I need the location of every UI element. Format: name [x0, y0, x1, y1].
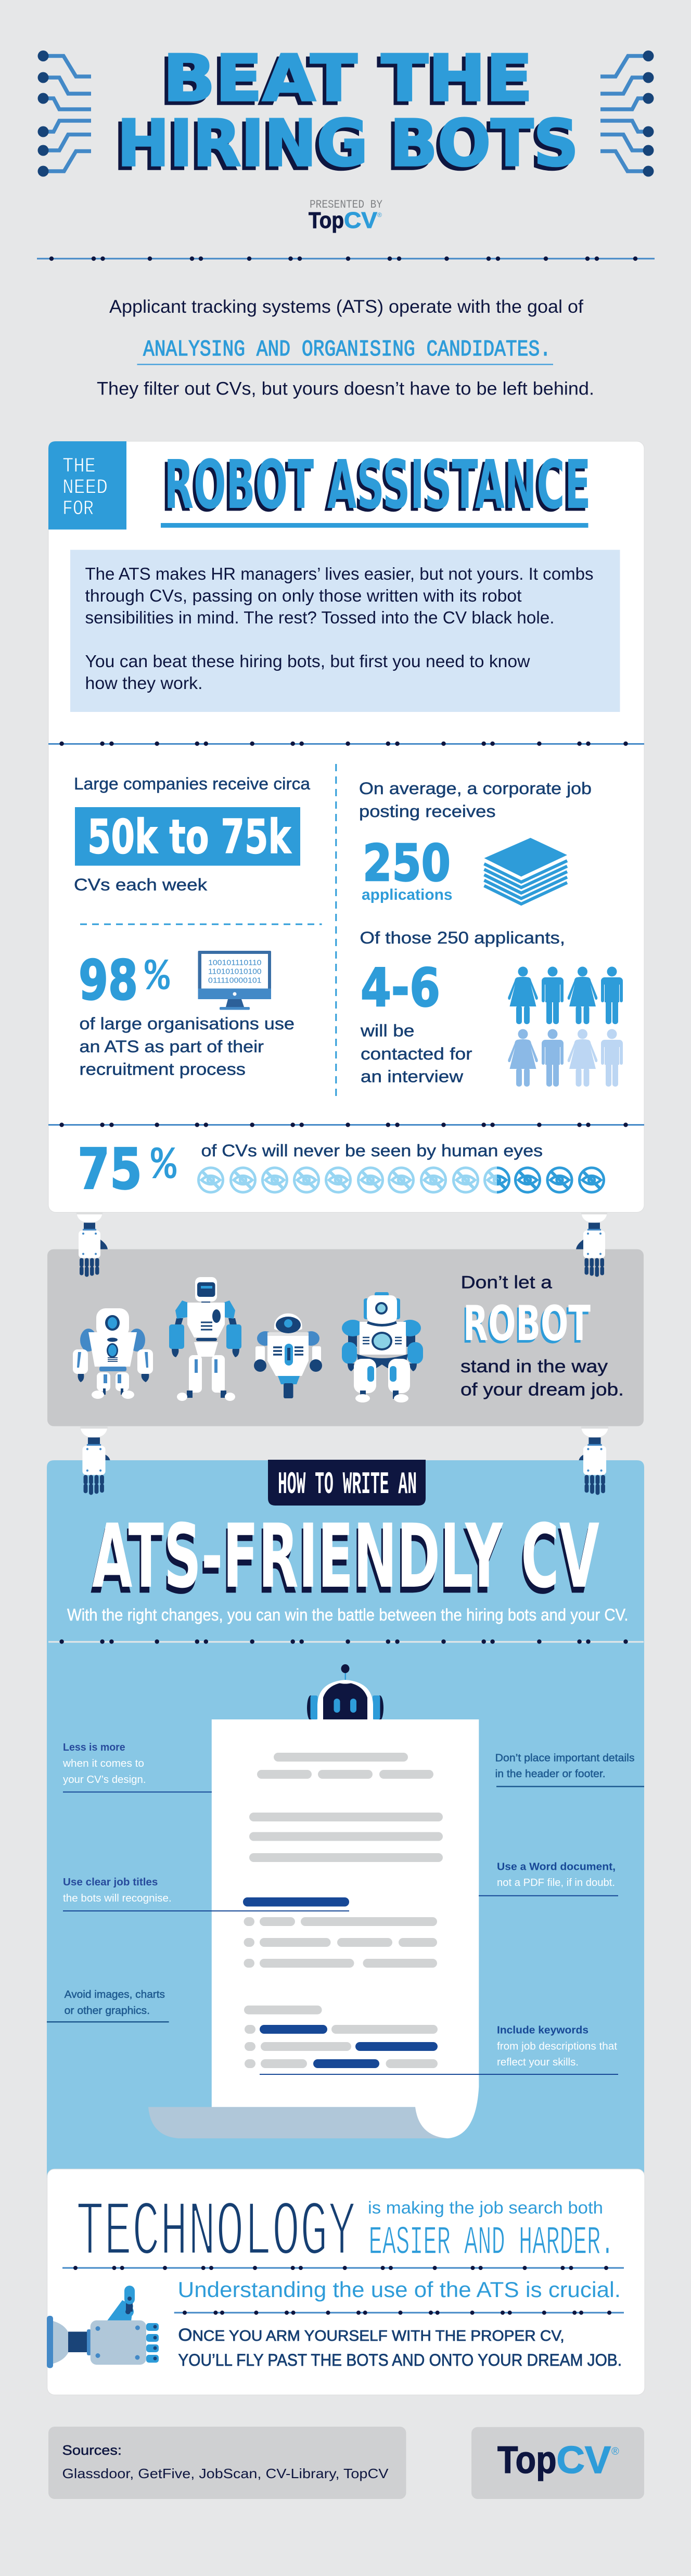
tip: avoid images	[47, 1989, 169, 2022]
stat: 250 applications	[359, 779, 592, 904]
stat: 50k to 75k: CVs each week	[74, 875, 208, 894]
panel: technology conclusion	[47, 2169, 645, 2395]
panel: don't let a robot	[47, 1249, 644, 1426]
tab: the need for	[48, 441, 126, 530]
stat: 75% never seen	[80, 1144, 605, 1194]
tab: the need for: NEED	[62, 477, 108, 500]
robot 2	[169, 1277, 241, 1401]
presented by TopCV logo: ®	[377, 211, 382, 219]
box: TopCV logo: CV	[557, 2439, 611, 2481]
text block: ATS explanation	[70, 550, 620, 712]
text block: ATS explanation: The ATS makes HR managers’ lives easier, but not yours. It combs	[85, 564, 593, 583]
subtitle: With the right changes, you can win the battle between the hiring bots and your CV.	[67, 1605, 629, 1624]
text: once you arm yourself	[178, 2325, 622, 2369]
stat: 250 applications: 250	[363, 834, 451, 892]
stat: 98% use an ATS: 98	[79, 949, 138, 1012]
presented by TopCV logo: Top	[309, 208, 344, 233]
stat: 4-6 contacted for an interview: an interview	[361, 1067, 464, 1086]
text: once you arm yourself: ONCE YOU ARM YOURSELF WITH THE PROPER CV,	[178, 2325, 565, 2345]
panel: how to write an ATS-friendly CV	[47, 1460, 644, 2178]
presented by TopCV logo: CV	[344, 208, 378, 233]
box: sources	[48, 2427, 406, 2499]
robot hand: upper right	[581, 1213, 607, 1277]
text block: ATS explanation: through CVs, passing on only those written with its robot	[85, 586, 521, 605]
tip: avoid images: or other graphics.	[65, 2005, 150, 2017]
robot hand: lower left	[80, 1426, 108, 1495]
intro text: They filter out CVs, but yours doesn’t have to be left behind.	[97, 379, 594, 399]
panel: robot assistance	[47, 441, 645, 2499]
text: easier and harder	[368, 2198, 614, 2266]
stat: 250 applications: On average, a corporate job	[359, 779, 592, 798]
title: Beat the Hiring Bots	[113, 42, 579, 185]
stat: 75% never seen: 75	[78, 1137, 142, 1202]
text: don't let a robot stand in the way: ROBOT	[463, 1295, 591, 1351]
tip: less is more: when it comes to	[62, 1758, 144, 1769]
tab: the need for: FOR	[62, 498, 94, 521]
icon: people grid	[508, 967, 623, 1087]
robot hand: lower right	[581, 1426, 608, 1495]
tip: less is more: Less is more	[63, 1742, 125, 1753]
box: TopCV logo: ®	[611, 2446, 619, 2457]
stat: 250 applications: applications	[362, 886, 453, 903]
stat: 75% never seen: of CVs will never be seen by human eyes	[201, 1141, 543, 1160]
text: don't let a robot stand in the way: Don’t let a	[461, 1273, 552, 1293]
title: Beat the Hiring Bots: BEAT THE	[159, 45, 529, 120]
icon: computer monitor: 110101010100	[208, 967, 261, 976]
tip: avoid images: Avoid images, charts	[65, 1989, 165, 2000]
box: TopCV logo: Top	[497, 2439, 557, 2481]
intro text: ANALYSING AND ORGANISING CANDIDATES.	[143, 337, 551, 363]
title: Beat the Hiring Bots: HIRING BOTS	[113, 110, 575, 185]
stat: 50k to 75k: 50k to 75k	[87, 810, 292, 864]
robot hand: upper left	[76, 1213, 103, 1277]
tip: include keywords	[260, 2025, 618, 2075]
text block: ATS explanation: You can beat these hiring bots, but first you need to know	[85, 652, 530, 671]
tip: don't place important details	[495, 1753, 644, 1787]
text: don't let a robot stand in the way: stand in the way	[460, 1357, 608, 1376]
stat: 98% use an ATS: recruitment process	[79, 1060, 246, 1078]
icon: computer monitor: 100101110110	[208, 959, 261, 967]
tip: use clear job titles: Use clear job titles	[63, 1877, 158, 1888]
icon: circuit lines left	[37, 50, 91, 177]
stat: 4-6 contacted for an interview: contacted for	[361, 1044, 472, 1063]
icon: computer monitor: 011110000101	[208, 976, 261, 985]
title: Beat the Hiring Bots: HIRING BOTS	[117, 107, 579, 181]
tip: use a word document: not a PDF file, if in doubt.	[497, 1877, 615, 1889]
stat: 50k to 75k: Large companies receive circa	[74, 774, 310, 793]
stat: 4-6 contacted for an interview: 4-6	[361, 957, 440, 1018]
text: don't let a robot stand in the way	[460, 1273, 624, 1400]
stat: 98% use an ATS: %	[145, 952, 170, 1003]
badge: how to write an	[268, 1460, 426, 1506]
icons: crossed-out eyes	[199, 1168, 604, 1192]
robot 3	[254, 1313, 322, 1398]
stat: 4-6 contacted for an interview: will be	[360, 1021, 414, 1040]
stat: 98% use an ATS: of large organisations use	[79, 1014, 295, 1033]
presented by TopCV logo: PRESENTED BY	[310, 198, 382, 211]
text: don't let a robot stand in the way: of your dream job.	[460, 1380, 624, 1400]
presented by TopCV logo	[309, 198, 382, 233]
stat: 4-6 contacted for an interview	[360, 928, 623, 1087]
tip: use a word document	[479, 1861, 618, 1896]
tip: use clear job titles	[63, 1877, 349, 1911]
tip: don't place important details: in the header or footer.	[495, 1768, 606, 1780]
intro text: Applicant tracking systems (ATS) operate with the goal of	[109, 297, 583, 317]
intro text	[97, 297, 594, 399]
icon: circuit lines right	[600, 50, 654, 177]
tip: don't place important details: Don’t place important details	[495, 1753, 635, 1764]
tip: less is more	[62, 1742, 212, 1792]
badge: how to write an: HOW TO WRITE AN	[278, 1468, 417, 1503]
tip: use clear job titles: the bots will recognise.	[63, 1893, 172, 1904]
text block: ATS explanation: how they work.	[85, 673, 203, 693]
illustration: CV document	[148, 1719, 479, 2138]
tip: include keywords: from job descriptions that	[497, 2041, 617, 2052]
robot 4	[342, 1292, 423, 1402]
tip: include keywords: reflect your skills.	[497, 2057, 579, 2068]
stat: 98% use an ATS: an ATS as part of their	[79, 1037, 264, 1056]
title: Beat the Hiring Bots: BEAT THE	[163, 42, 533, 116]
icon: robot thumbs up	[47, 2286, 159, 2368]
tip: use a word document: Use a Word document,	[497, 1861, 616, 1872]
stat: 50k to 75k	[74, 774, 310, 894]
tip: include keywords: Include keywords	[497, 2025, 588, 2036]
heading: technology: TECHNOLOGY	[76, 2189, 356, 2278]
text: easier and harder: is making the job search both	[368, 2198, 603, 2217]
icon: robot peeking over CV	[307, 1664, 383, 1720]
text: once you arm yourself: YOU’LL FLY PAST THE BOTS AND ONTO YOUR DREAM JOB.	[178, 2351, 622, 2369]
box: TopCV logo	[471, 2427, 644, 2499]
stat: 250 applications: posting receives	[359, 802, 495, 821]
stat: 4-6 contacted for an interview: Of those 250 applicants,	[360, 928, 565, 947]
box: sources: Glassdoor, GetFive, JobScan, CV-Library, TopCV	[62, 2466, 389, 2481]
stat: 75% never seen: %	[151, 1140, 177, 1192]
icon: computer monitor	[198, 951, 271, 1010]
box: sources: Sources:	[62, 2442, 122, 2458]
tip: less is more: your CV’s design.	[63, 1774, 146, 1786]
text block: ATS explanation: sensibilities in mind. The rest? Tossed into the CV black hole.	[85, 608, 555, 627]
stat: 98% use an ATS	[79, 949, 295, 1078]
robot 1	[73, 1308, 153, 1399]
text: don't let a robot stand in the way: ROBOT	[462, 1298, 588, 1354]
tab: the need for: THE	[62, 455, 96, 479]
text: understanding the ATS: Understanding the use of the ATS is crucial.	[178, 2277, 621, 2302]
icon: stack of papers	[484, 838, 567, 904]
